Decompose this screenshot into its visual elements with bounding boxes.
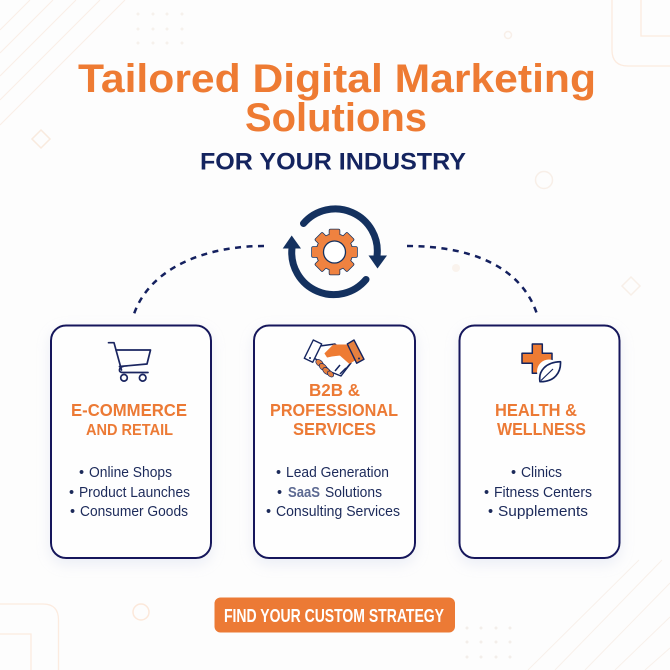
list: • — [70, 504, 75, 520]
background decoration: dot grid top — [136, 12, 184, 44]
list: • — [69, 485, 74, 501]
heading — [495, 400, 586, 439]
background decoration: dot grid bottom — [466, 626, 512, 658]
panel: health and wellness — [460, 326, 620, 558]
heading — [71, 400, 187, 439]
list: • — [488, 504, 493, 520]
heading: WELLNESS — [497, 419, 586, 439]
title: Tailored Digital Marketing — [78, 57, 596, 101]
list: Consumer Goods — [80, 504, 188, 520]
list: • — [484, 485, 489, 501]
list: • — [511, 465, 516, 481]
list: Clinics — [521, 465, 562, 481]
background decoration: small circles and diamonds — [32, 32, 640, 620]
list — [69, 465, 190, 520]
icon: handshake — [304, 340, 364, 378]
subtitle: FOR YOUR INDUSTRY — [200, 148, 466, 176]
list: Lead Generation — [286, 465, 389, 481]
list: • — [277, 485, 282, 501]
icon: shopping cart — [108, 343, 150, 381]
list: Online Shops — [89, 465, 172, 481]
icon: medical cross and leaf — [522, 344, 561, 384]
heading — [270, 380, 398, 439]
list: Consulting Services — [276, 504, 400, 520]
icon: gear with cycle arrows — [283, 209, 387, 295]
list: SaaS — [288, 485, 320, 501]
heading: HEALTH & — [495, 400, 577, 420]
heading: AND RETAIL — [86, 422, 173, 439]
dashed connector right — [407, 246, 537, 314]
list — [484, 465, 592, 520]
heading: B2B & — [309, 380, 360, 400]
background decoration: diagonal lines top left — [0, 0, 125, 125]
list: Solutions — [325, 485, 382, 501]
button: call to action: FIND YOUR CUSTOM STRATEGY — [224, 606, 444, 626]
background decoration: rounded squares bottom left — [0, 604, 58, 670]
list: Fitness Centers — [494, 485, 592, 501]
background decoration: rounded squares top right — [612, 0, 670, 66]
title — [78, 57, 596, 140]
title: Solutions — [245, 96, 427, 140]
dashed connector left — [134, 246, 264, 314]
panel: e-commerce and retail — [51, 326, 211, 558]
panel: b2b and professional services — [254, 326, 415, 558]
button: call to action — [214, 598, 455, 632]
list: Supplements — [498, 504, 588, 520]
heading: SERVICES — [293, 419, 376, 439]
heading: PROFESSIONAL — [270, 400, 398, 420]
list: • — [266, 504, 271, 520]
list: Product Launches — [79, 485, 190, 501]
background decoration: diagonal lines bottom right — [528, 560, 670, 670]
list: • — [276, 465, 281, 481]
list — [266, 465, 400, 520]
heading: E-COMMERCE — [71, 400, 187, 420]
list: • — [79, 465, 84, 481]
